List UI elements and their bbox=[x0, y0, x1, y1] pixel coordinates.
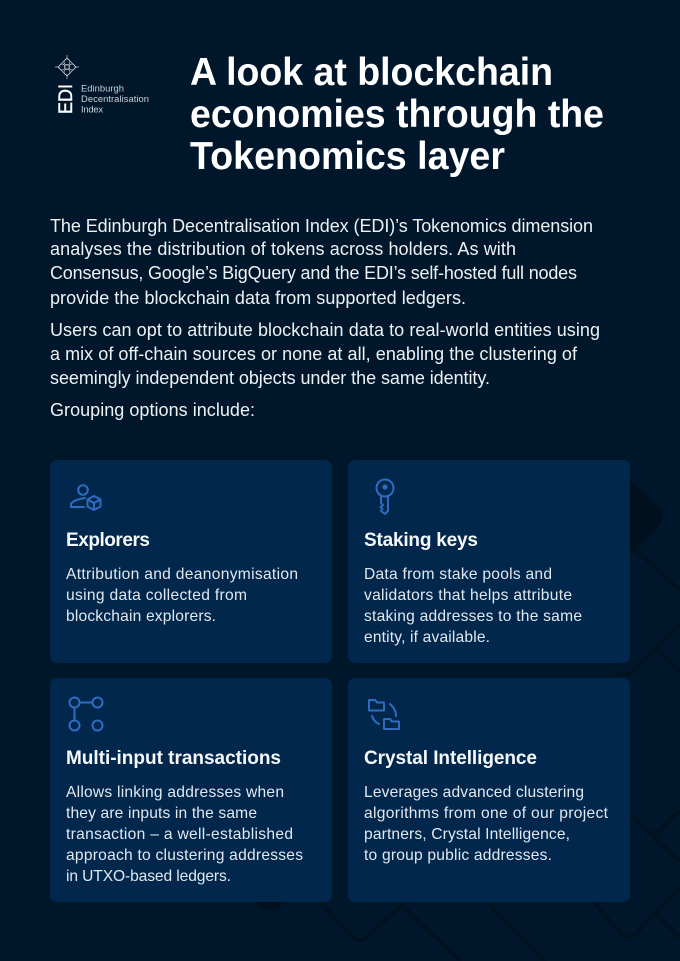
text bbox=[364, 784, 609, 864]
text bbox=[364, 566, 582, 646]
icon: connected nodes bbox=[70, 698, 102, 730]
title bbox=[190, 51, 604, 178]
logo label: Index bbox=[81, 104, 103, 114]
text bbox=[66, 566, 298, 625]
panel: Multi-input transactions bbox=[50, 678, 332, 902]
text: blockchain explorers. bbox=[66, 608, 216, 625]
icon: folders bbox=[369, 700, 399, 729]
text: Attribution and deanonymisation bbox=[66, 566, 298, 583]
text: Leverages advanced clustering bbox=[364, 784, 584, 801]
text: entity, if available. bbox=[364, 629, 490, 646]
text: they are inputs in the same bbox=[66, 805, 257, 822]
text block: introduction: Consensus, Google’s BigQuery and the EDI’s self-hosted full nodes bbox=[50, 263, 577, 283]
text: Data from stake pools and bbox=[364, 566, 552, 583]
heading: Multi-input transactions bbox=[66, 748, 281, 769]
icon: person with cube bbox=[71, 485, 100, 510]
panel: Explorers bbox=[50, 460, 332, 663]
text block: introduction: a mix of off-chain sources or none at all, enabling the clustering of bbox=[50, 344, 578, 364]
logo label: Edinburgh bbox=[81, 82, 124, 94]
text block: introduction: The Edinburgh Decentralisation Index (EDI)’s Tokenomics dimension bbox=[50, 216, 593, 236]
text: transaction – a well-established bbox=[66, 826, 293, 843]
heading: Explorers bbox=[66, 530, 150, 551]
logo wordmark: EDI: EDI bbox=[56, 84, 77, 114]
text block: introduction: analyses the distribution of tokens across holders. As with bbox=[50, 239, 516, 259]
title: A look at blockchain bbox=[190, 51, 553, 94]
text block: introduction bbox=[50, 216, 600, 420]
text: staking addresses to the same bbox=[364, 608, 582, 625]
text block: introduction: provide the blockchain data from supported ledgers. bbox=[50, 288, 466, 308]
logo: Edinburgh Decentralisation Index bbox=[55, 55, 149, 114]
panel: Crystal Intelligence bbox=[348, 678, 630, 902]
text: partners, Crystal Intelligence, bbox=[364, 826, 570, 843]
logo label: Decentralisation bbox=[81, 93, 149, 104]
text: Allows linking addresses when bbox=[66, 784, 284, 801]
text: in UTXO-based ledgers. bbox=[66, 868, 231, 885]
text: algorithms from one of our project bbox=[364, 805, 609, 822]
icon: key bbox=[376, 480, 394, 514]
title: Tokenomics layer bbox=[190, 135, 505, 178]
icon: network diamond bbox=[55, 55, 79, 79]
logo label bbox=[81, 82, 149, 114]
title: economies through the bbox=[190, 93, 604, 136]
heading: Crystal Intelligence bbox=[364, 748, 537, 769]
panel: Staking keys bbox=[348, 460, 630, 663]
text: validators that helps attribute bbox=[364, 587, 572, 604]
text block: introduction: Users can opt to attribute blockchain data to real-world entities using bbox=[50, 320, 600, 340]
text: using data collected from bbox=[66, 587, 247, 604]
heading: Staking keys bbox=[364, 530, 478, 551]
text block: introduction: Grouping options include: bbox=[50, 400, 255, 420]
text bbox=[66, 784, 303, 885]
text block: introduction: seemingly independent objects under the same identity. bbox=[50, 368, 490, 388]
text: to group public addresses. bbox=[364, 847, 552, 864]
text: approach to clustering addresses bbox=[66, 847, 303, 864]
